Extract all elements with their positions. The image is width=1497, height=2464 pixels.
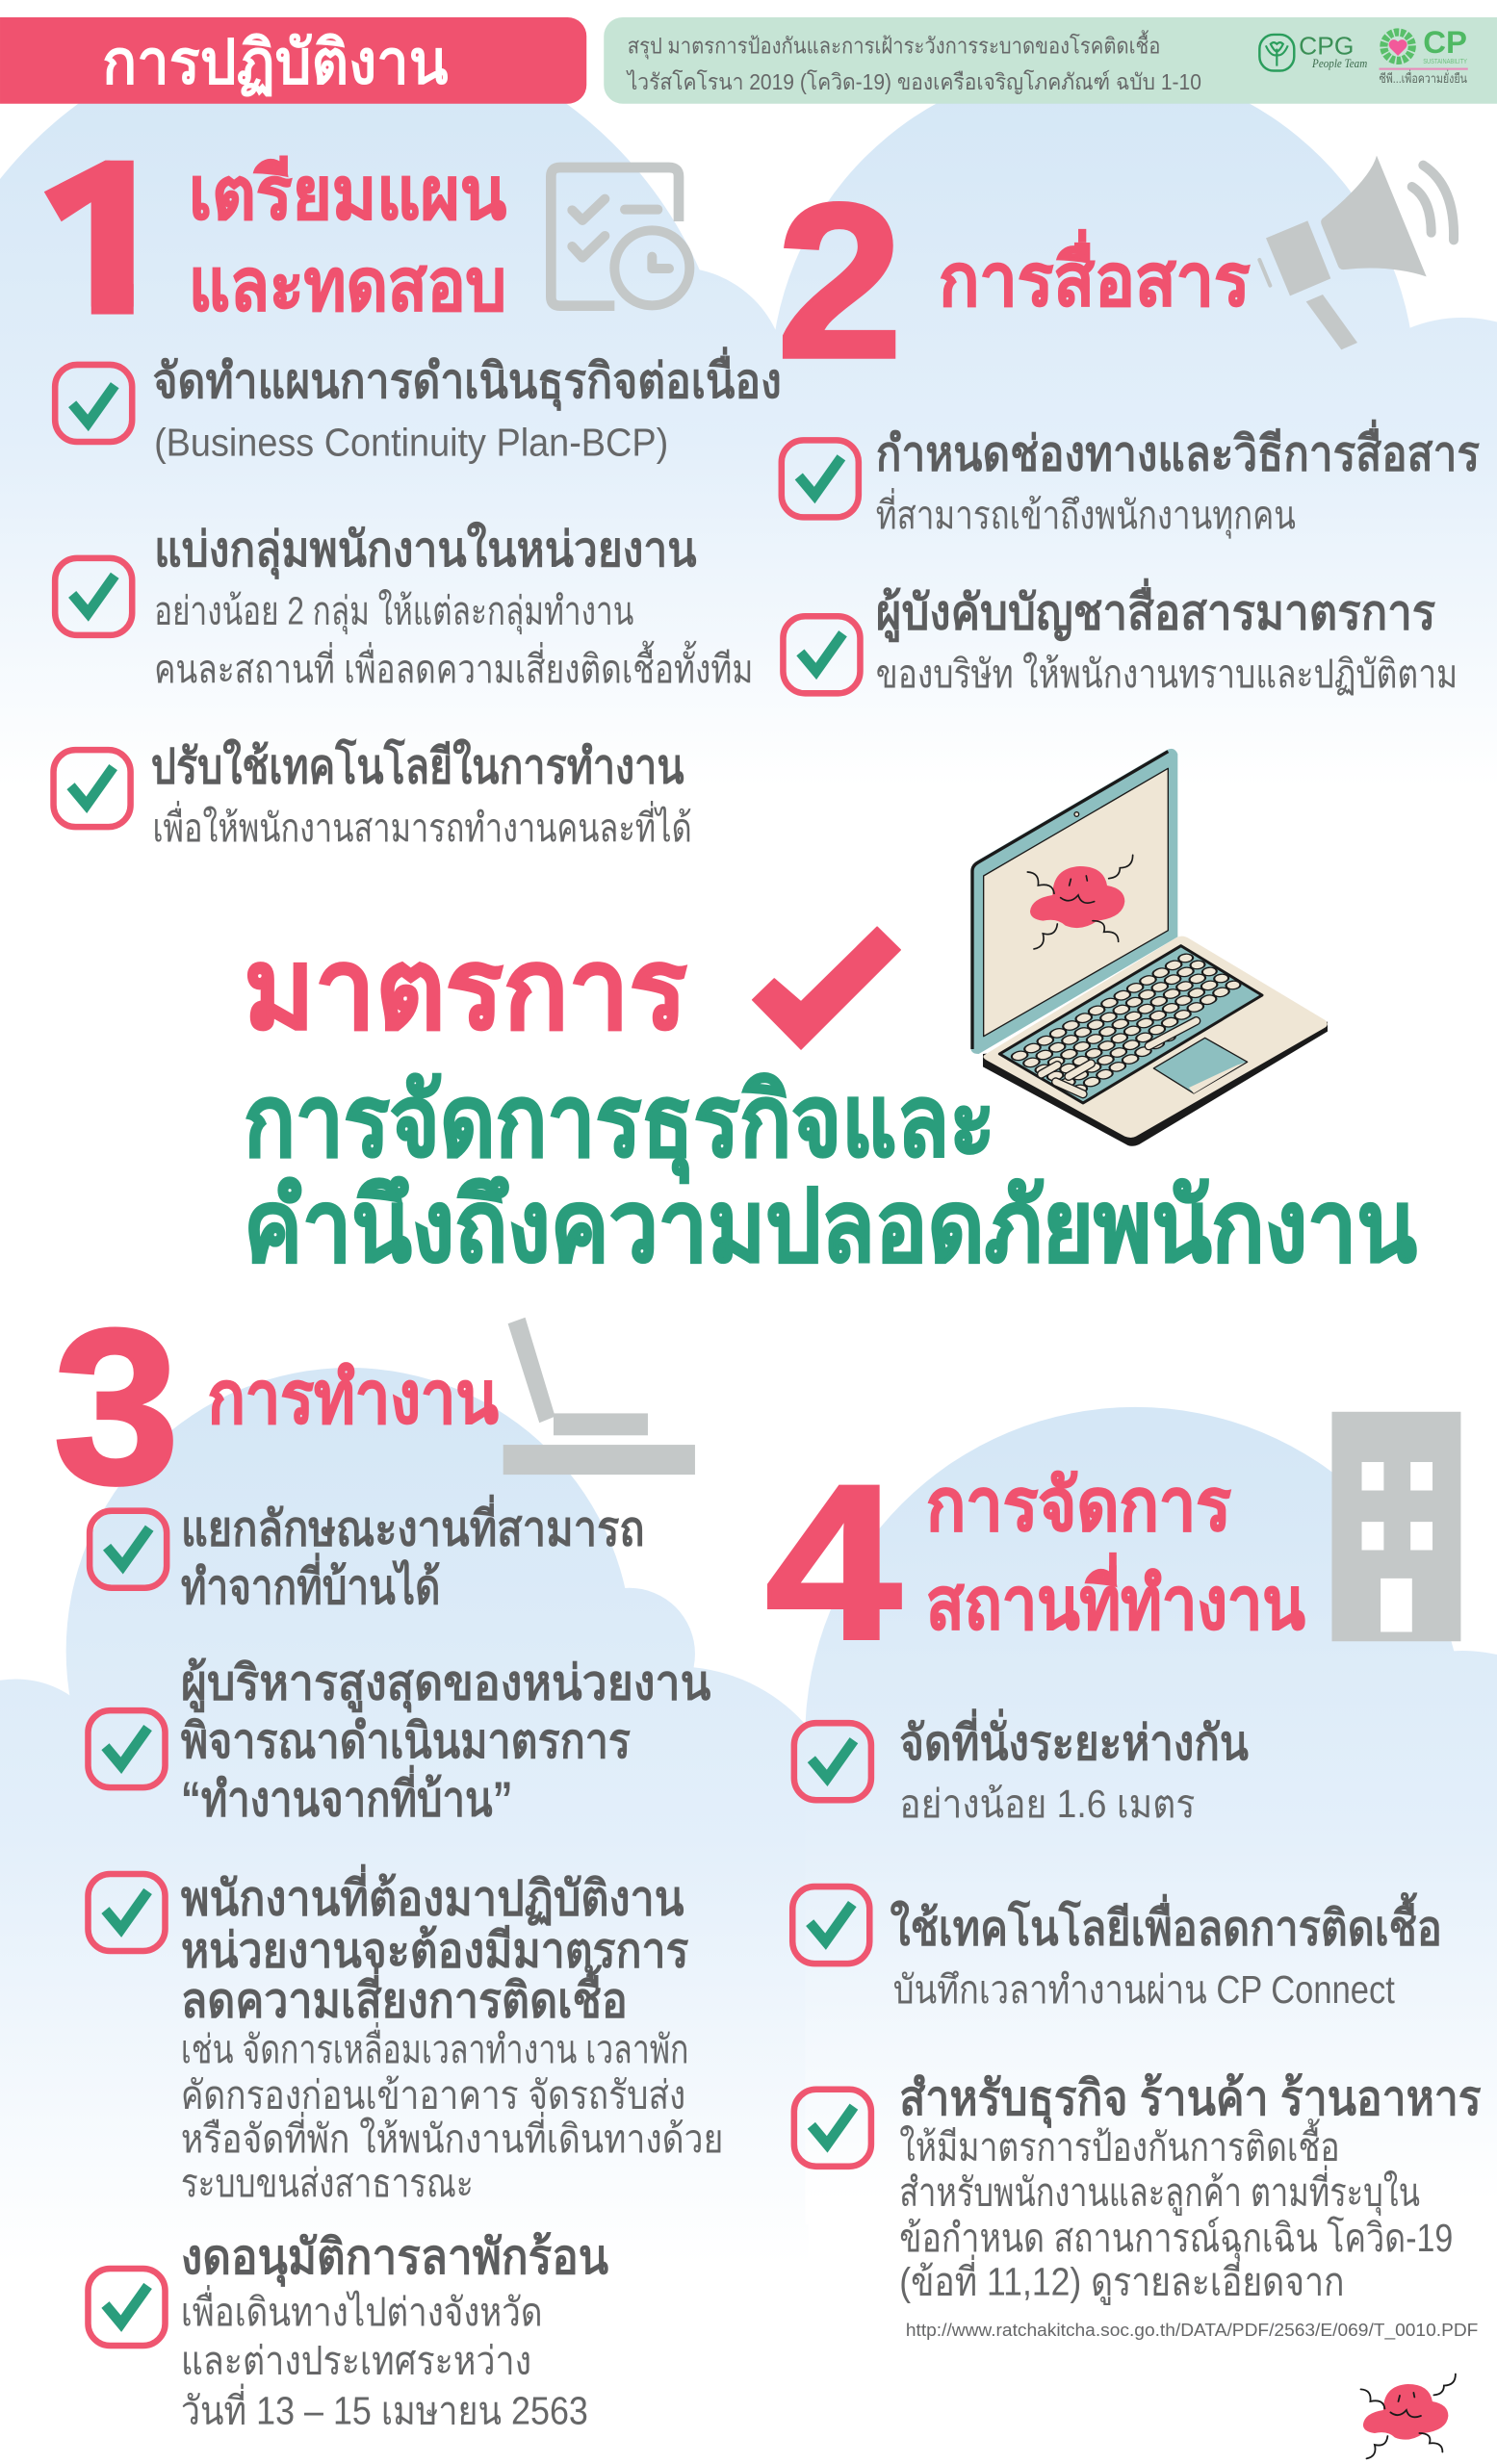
heading: section 4 [926, 1464, 1305, 1644]
item: leave suspension: วันที่ 13 – 15 เมษายน 2563 [181, 2384, 588, 2433]
item: shops and restaurants [794, 2070, 1482, 2306]
item: executives: “ทำงานจากที่บ้าน” [181, 1765, 512, 1827]
summary text: ไวรัสโคโรนา 2019 (โควิด-19) ของเครือเจริญโภคภัณฑ์ ฉบับ 1-10 [626, 69, 1201, 94]
item: split staff [55, 521, 753, 691]
heading: section 1: และทดสอบ [189, 244, 506, 325]
item: on-site staff: พนักงานที่ต้องมาปฏิบัติงาน [181, 1863, 684, 1925]
item: shops and restaurants: (ข้อที่ 11,12) ดูรายละเอียดจาก [899, 2255, 1345, 2306]
heading: section 4: สถานที่ทำงาน [926, 1553, 1305, 1644]
item: technology: ปรับใช้เทคโนโลยีในการทำงาน [151, 736, 684, 793]
center title [244, 926, 1417, 1283]
icon: laptop silhouette [503, 1318, 695, 1475]
header banner: title [0, 17, 586, 104]
item: executives [88, 1656, 711, 1827]
number 3: 3 [54, 1284, 179, 1529]
item: technology to reduce infection: บันทึกเวลาทำงานผ่าน CP Connect [893, 1967, 1395, 2012]
header banner: summary and logos [604, 17, 1497, 104]
logo: CP for sustainability [1379, 24, 1468, 86]
item: BCP: (Business Continuity Plan-BCP) [154, 421, 668, 465]
icon: megaphone [1259, 156, 1454, 349]
item: split staff: แบ่งกลุ่มพนักงานในหน่วยงาน [154, 521, 697, 579]
panel 2: communication [777, 156, 1480, 696]
item: executives: พิจารณาดำเนินมาตรการ [181, 1713, 631, 1768]
number 1: 1 [47, 109, 142, 354]
item: seating [794, 1708, 1249, 1826]
item: channels: ที่สามารถเข้าถึงพนักงานทุกคน [876, 488, 1296, 539]
item: shops and restaurants: ให้มีมาตรการป้องกันการติดเชื้อ [899, 2118, 1340, 2169]
item: split staff: อย่างน้อย 2 กลุ่ม ให้แต่ละกลุ่มทำงาน [154, 588, 633, 634]
panel 1: prepare plan [47, 109, 782, 850]
icon: virus mascot bottom right [1360, 2374, 1456, 2458]
summary text [626, 31, 1201, 94]
heading: section 2: การสื่อสาร [939, 229, 1251, 321]
item: on-site staff [88, 1863, 723, 2205]
item: BCP [55, 346, 782, 465]
item: supervisors [783, 578, 1458, 696]
item: channels [782, 419, 1480, 539]
heading: section 3: การทำงาน [208, 1357, 499, 1438]
title line: business management: การจัดการธุรกิจและ [244, 1065, 995, 1184]
number 2: 2 [777, 159, 903, 404]
item: technology to reduce infection [792, 1886, 1442, 2012]
panel 3: working [54, 1284, 723, 2433]
item: on-site staff: ระบบขนส่งสาธารณะ [181, 2161, 474, 2205]
item: on-site staff: คัดกรองก่อนเข้าอาคาร จัดรถรับส่ง [181, 2072, 685, 2117]
logo: CPG People Team: People Team [1311, 56, 1367, 70]
item: supervisors: ผู้บังคับบัญชาสื่อสารมาตรการ [876, 578, 1435, 642]
number 4: 4 [765, 1440, 901, 1685]
logo: CPG People Team: CPG [1299, 31, 1354, 60]
item: work types [90, 1495, 645, 1614]
item: seating: อย่างน้อย 1.6 เมตร [899, 1782, 1195, 1826]
item: on-site staff: เช่น จัดการเหลื่อมเวลาทำงาน เวลาพัก [181, 2022, 688, 2071]
heading: section 1 [189, 153, 506, 325]
logo: CP for sustainability: SUSTAINABILITY [1423, 57, 1467, 65]
logo: CP for sustainability: CP [1423, 24, 1467, 60]
item: executives: ผู้บริหารสูงสุดของหน่วยงาน [181, 1656, 711, 1713]
item: technology: เพื่อให้พนักงานสามารถทำงานคนละที่ได้ [152, 801, 692, 850]
item: work types: ทำจากที่บ้านได้ [181, 1553, 440, 1614]
item: on-site staff: ลดความเสี่ยงการติดเชื้อ [181, 1964, 628, 2028]
item: work types: แยกลักษณะงานที่สามารถ [181, 1495, 645, 1556]
icon: big check [753, 927, 900, 1049]
item: on-site staff: หน่วยงานจะต้องมีมาตรการ [181, 1922, 688, 1977]
logo: CP for sustainability: ซีพี...เพื่อความยั่งยืน [1379, 69, 1467, 86]
item: split staff: คนละสถานที่ เพื่อลดความเสี่ยงติดเชื้อทั้งทีม [154, 640, 753, 691]
item: leave suspension [88, 2229, 608, 2433]
item: leave suspension: และต่างประเทศระหว่าง [181, 2338, 531, 2382]
item: technology [54, 736, 692, 850]
illustration: laptop with virus [970, 749, 1328, 1146]
icon: building [1331, 1412, 1460, 1641]
logo: CPG People Team [1259, 31, 1367, 71]
item: leave suspension: งดอนุมัติการลาพักร้อน [181, 2229, 608, 2287]
header banner: title: การปฏิบัติงาน [102, 29, 449, 97]
item: seating: จัดที่นั่งระยะห่างกัน [899, 1708, 1249, 1770]
item: on-site staff: หรือจัดที่พัก ให้พนักงานที่เดินทางด้วย [181, 2112, 723, 2161]
title word: measures: มาตรการ [244, 926, 687, 1052]
icon: checklist with clock [551, 167, 689, 306]
heading: section 1: เตรียมแผน [189, 153, 506, 234]
source url: http://www.ratchakitcha.soc.go.th/DATA/PDF/2563/E/069/T_0010.PDF [906, 2320, 1478, 2341]
item: BCP: จัดทำแผนการดำเนินธุรกิจต่อเนื่อง [152, 346, 782, 411]
icon: virus cloud on screen [1027, 855, 1133, 949]
summary text: สรุป มาตรการป้องกันและการเฝ้าระวังการระบาดของโรคติดเชื้อ [628, 31, 1160, 60]
panel 4: workplace [765, 1412, 1482, 2341]
heading: section 4: การจัดการ [926, 1464, 1231, 1545]
item: leave suspension: เพื่อเดินทางไปต่างจังหวัด [181, 2285, 543, 2334]
